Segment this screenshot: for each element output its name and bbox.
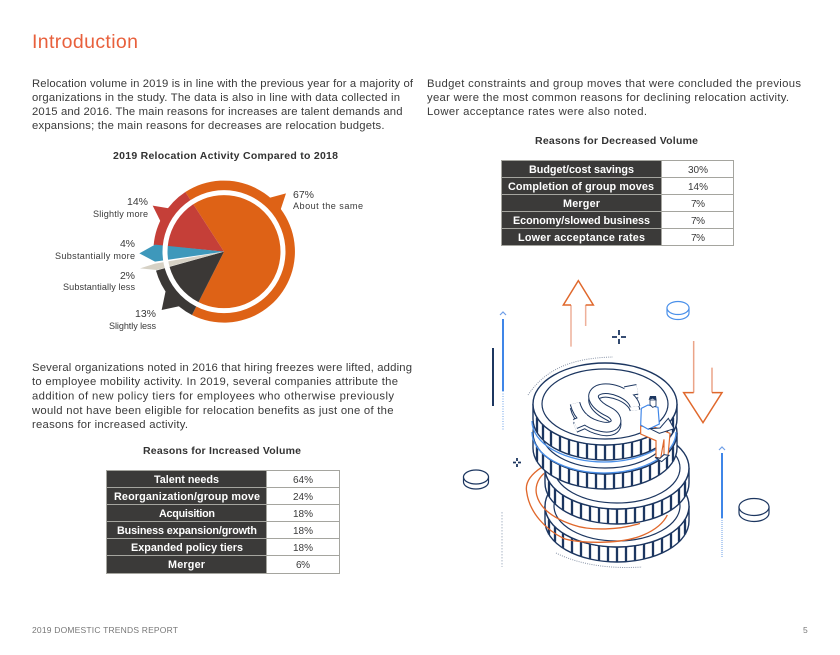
icon: sparkles: [513, 330, 626, 467]
table: reasons for decreased volume: Completion of group moves: [508, 181, 654, 193]
table: reasons for increased volume: 18%: [293, 509, 313, 520]
icon: person with laptop: [641, 396, 674, 462]
text block: intro left: 2015 and 2016. The main reasons for increases are talent demands and: [32, 106, 402, 118]
orange rings: [526, 467, 667, 542]
accent lines: [493, 312, 725, 567]
table: reasons for decreased volume: Lower acceptance rates: [518, 232, 645, 244]
pie label: 13%: Slightly less: [109, 321, 156, 331]
table: reasons for decreased volume: 7%: [691, 216, 705, 227]
table: reasons for increased volume: Business expansion/growth: [117, 525, 257, 537]
table: reasons for increased volume: Talent needs: [154, 474, 219, 486]
slice: slightly less 13%: [156, 252, 224, 315]
slice: about the same 67%: [185, 181, 295, 323]
text block: intro right: Lower acceptance rates were also noted.: [427, 106, 647, 118]
pie label: 4%: [55, 238, 135, 261]
text block: intro right: Budget constraints and group moves that were concluded the previous: [427, 78, 801, 90]
text block: hiring freezes: Several organizations noted in 2016 that hiring freezes were lifted, adding: [32, 362, 412, 374]
arrow: up: [563, 281, 593, 347]
pie label: 67%: About the same: [293, 201, 363, 211]
pie label: 13%: 13%: [135, 308, 156, 320]
text block: intro left: Relocation volume in 2019 is in line with the previous year for a majority of: [32, 78, 414, 90]
table: reasons for increased volume: 6%: [296, 560, 310, 571]
text block: intro right: year were the most common reasons for declining relocation activity.: [427, 92, 789, 104]
table: reasons for decreased volume: Budget/cost savings: [529, 164, 634, 176]
table: reasons for decreased volume: 7%: [691, 199, 705, 210]
table: reasons for decreased volume: [502, 160, 734, 246]
pie label: 4%: Substantially more: [55, 251, 135, 261]
text block: hiring freezes: would not have been eligible for relocation benefits as just one of the: [31, 405, 394, 417]
text block: hiring freezes: addition of new policy tiers for employees who otherwise previously: [32, 390, 394, 402]
pie label: 14%: Slightly more: [93, 209, 148, 219]
pie label: 13%: [109, 308, 156, 331]
table: reasons for decreased volume: Merger: [563, 198, 601, 210]
pie label: 2%: 2%: [120, 270, 135, 282]
text block: intro right: [427, 78, 801, 118]
pie label: 14%: [93, 196, 148, 219]
pie label: 67%: 67%: [293, 189, 314, 201]
illustration: coin stack: [464, 281, 769, 567]
heading: pie chart: 2019 Relocation Activity Compared to 2018: [113, 150, 338, 162]
table: reasons for increased volume: Acquisition: [159, 508, 215, 520]
table: reasons for decreased volume: 14%: [688, 182, 708, 193]
coin 3: [545, 427, 689, 524]
table: reasons for increased volume: 18%: [293, 543, 313, 554]
slice: substantially less 2%: [140, 252, 224, 270]
table: reasons for increased volume: 18%: [293, 526, 313, 537]
table: reasons for decreased volume: Economy/slowed business: [513, 215, 650, 227]
icon: small right coin: [739, 498, 769, 522]
table: reasons for increased volume: Merger: [168, 559, 206, 571]
pie label: 2%: [63, 270, 135, 292]
heading: decreased table: Reasons for Decreased Volume: [535, 135, 698, 147]
table: reasons for increased volume: 24%: [293, 492, 313, 503]
title: Introduction: [32, 31, 138, 53]
slice: substantially more 4%: [139, 245, 224, 262]
text block: intro left: expansions; the main reasons for decreases are relocation budgets.: [32, 120, 384, 132]
pie label: 67%: [293, 189, 363, 211]
blue rims: [532, 421, 676, 473]
footer label: 2019 DOMESTIC TRENDS REPORT: [32, 625, 178, 635]
coin 2: [533, 392, 677, 489]
table: reasons for increased volume: Expanded policy tiers: [131, 542, 243, 554]
coin 1 with dollar: [533, 363, 677, 460]
table: reasons for decreased volume: 7%: [691, 233, 705, 244]
page number: 5: [803, 625, 808, 635]
table: reasons for increased volume: Reorganization/group move: [114, 491, 260, 503]
table: reasons for increased volume: 64%: [293, 475, 313, 486]
text block: hiring freezes: [31, 362, 412, 431]
text block: hiring freezes: reasons for increased activity.: [32, 419, 188, 431]
pie chart: [139, 181, 295, 323]
text block: hiring freezes: to employee mobility activity. In 2019, several companies attribute the: [32, 376, 398, 388]
text block: intro left: [32, 78, 414, 132]
pie label: 2%: Substantially less: [63, 282, 135, 292]
heading: increased table: Reasons for Increased Volume: [143, 445, 301, 457]
table: reasons for decreased volume: 30%: [688, 165, 708, 176]
icon: small blue coin: [667, 302, 689, 320]
icon: dollar sign: [575, 389, 637, 431]
icon: small left coin: [464, 470, 488, 489]
pie label: 4%: 4%: [120, 238, 135, 250]
text block: intro left: organizations in the study. The data is also in line with data collected in: [32, 92, 400, 104]
arrow: down: [684, 341, 722, 423]
coin 4: [545, 465, 689, 562]
pie label: 14%: 14%: [127, 196, 148, 208]
slice: slightly more 14%: [153, 192, 224, 252]
table: reasons for increased volume: [106, 470, 340, 574]
